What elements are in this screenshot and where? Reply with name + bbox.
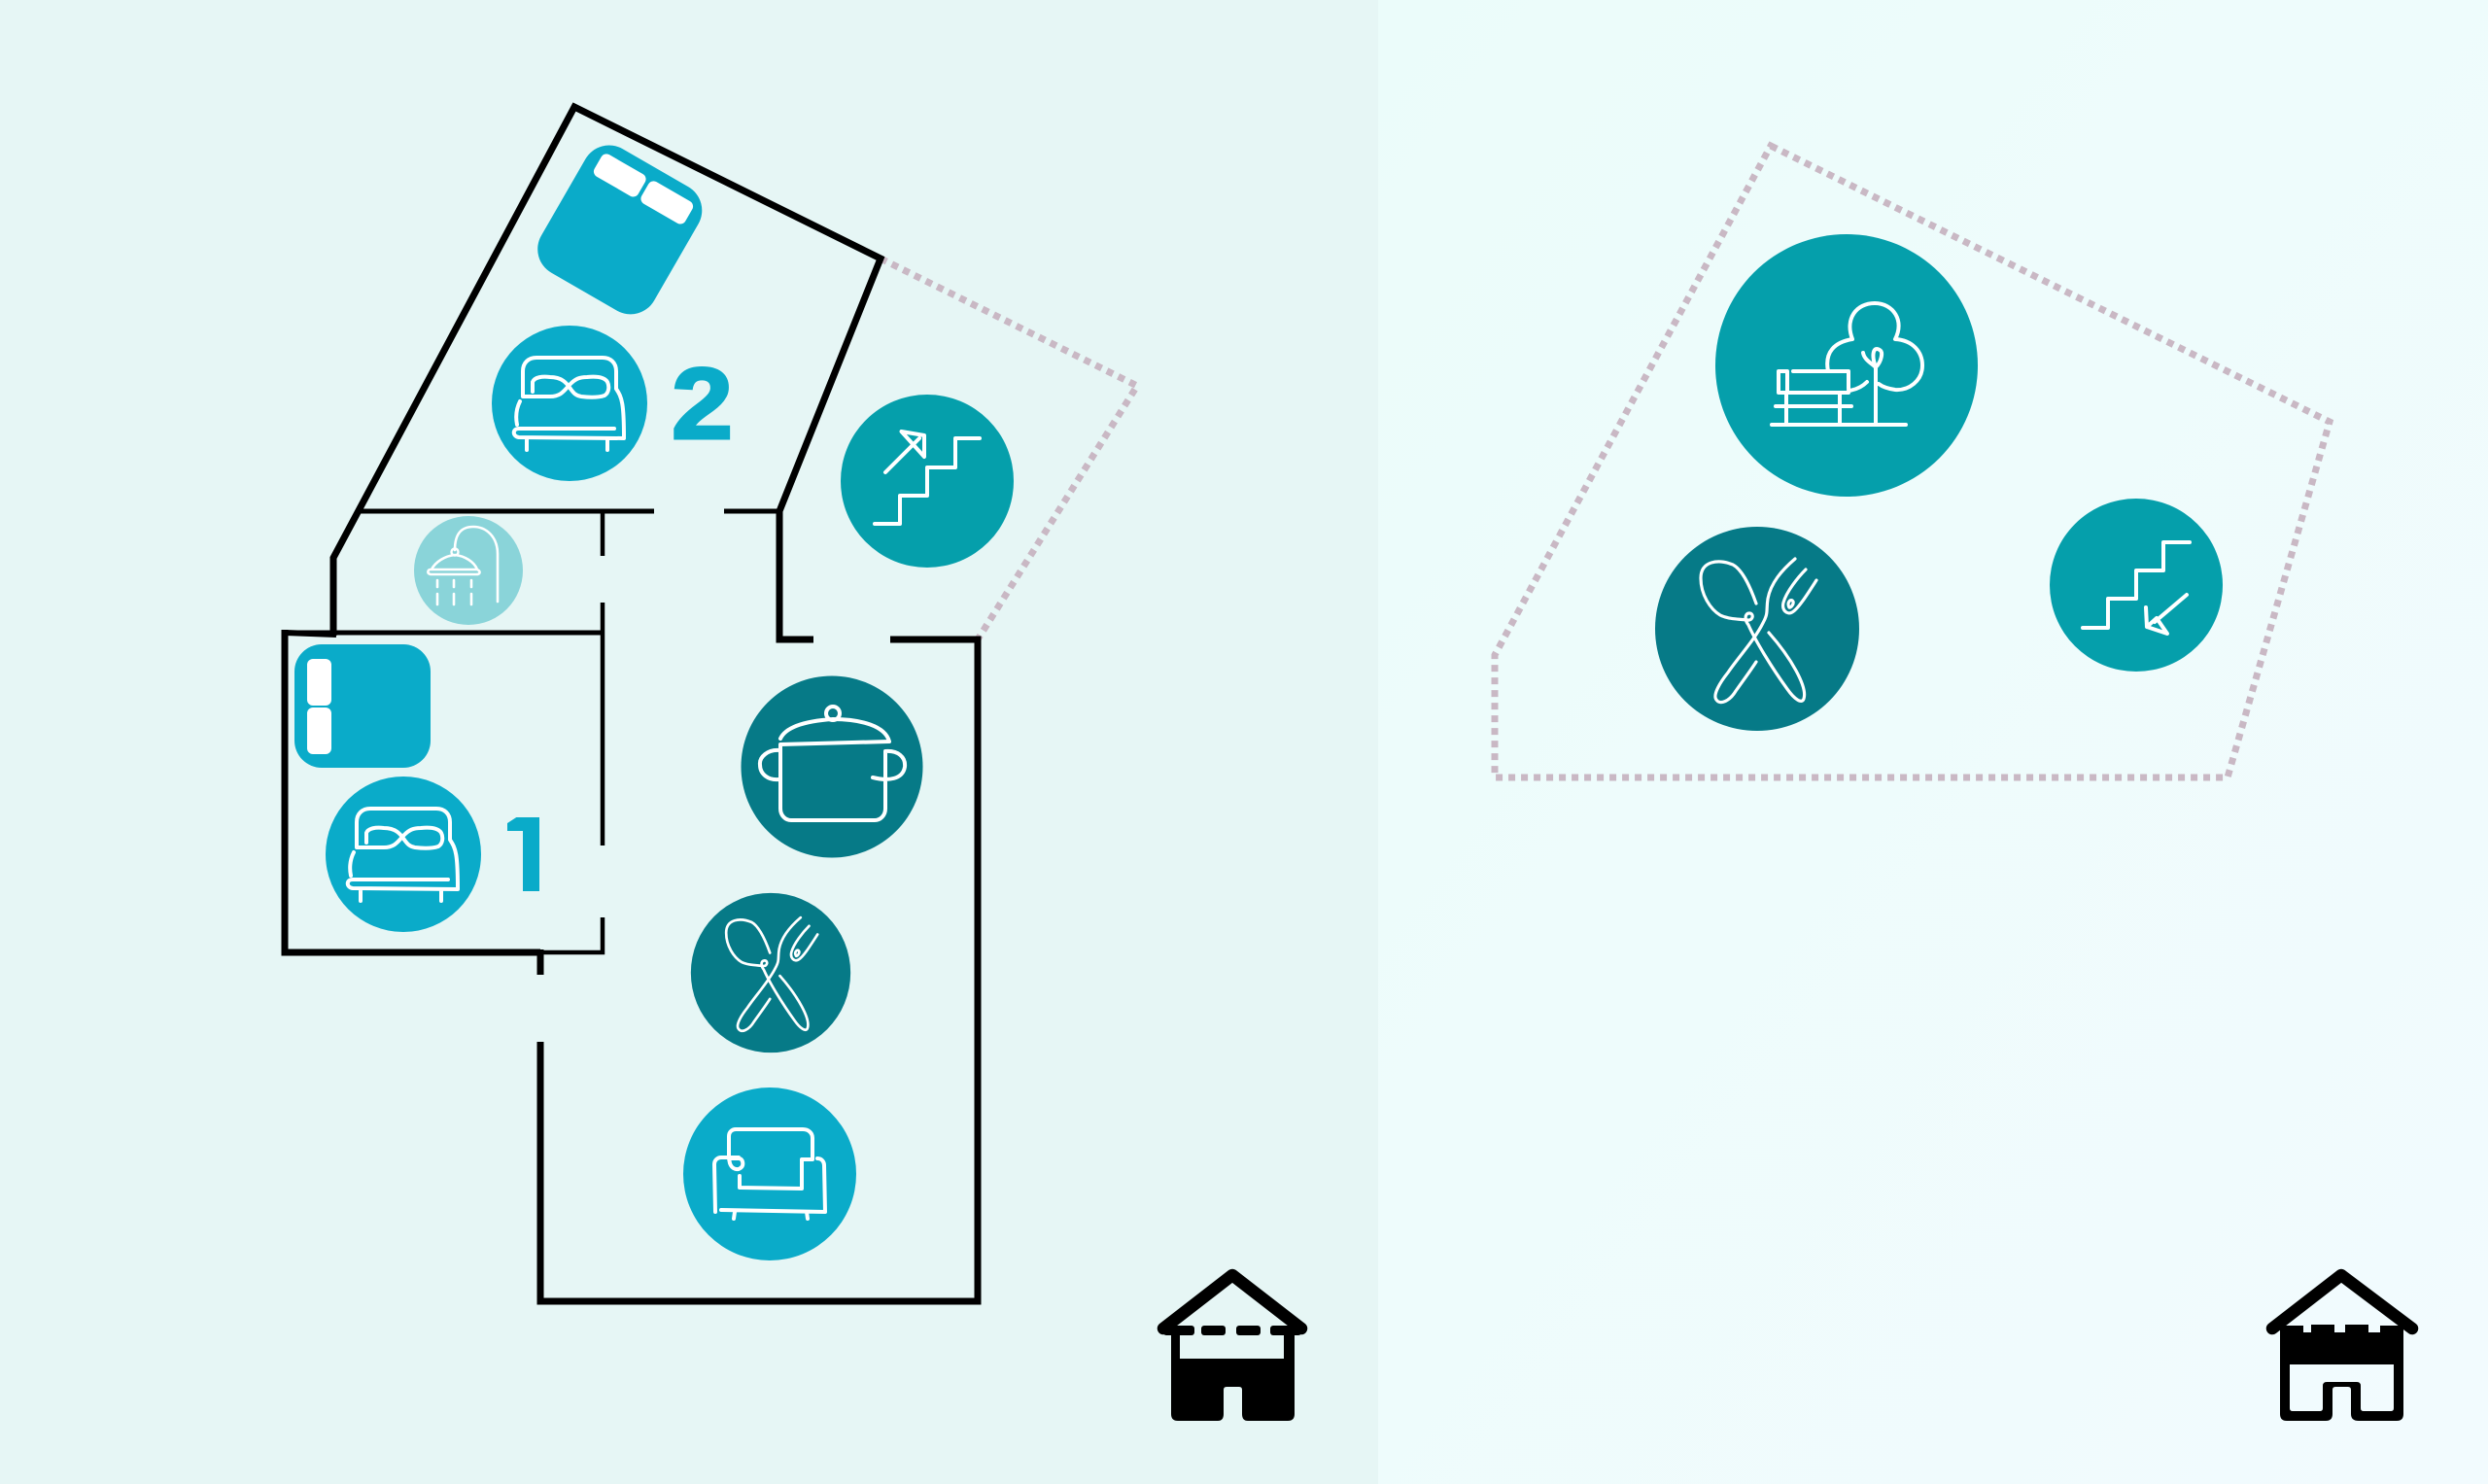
icon: house upper floor [2272, 1275, 2412, 1421]
icon: shower [414, 516, 523, 625]
icon: sofa [683, 1087, 856, 1260]
icon: stairs up [841, 395, 1014, 568]
number 2: 2 [672, 348, 733, 461]
icon: cooking pot [741, 676, 923, 857]
icon: house ground floor [1163, 1275, 1301, 1421]
dotted upper floor outline [1495, 146, 2330, 777]
icon: park bench and tree [1715, 234, 1978, 497]
icon: cutlery [691, 893, 850, 1053]
icon: bed room 2 [492, 326, 647, 481]
icon: cutlery [1655, 527, 1859, 731]
bed shape: room 2 [528, 135, 712, 325]
dotted terrace outline [881, 259, 1137, 639]
number 1: 1 [500, 799, 557, 914]
icon: bed room 1 [326, 777, 481, 932]
bed shape: room 1 [294, 644, 431, 768]
panel: ground floor background [0, 0, 1378, 1484]
ground floor plan [285, 107, 1301, 1421]
icon: stairs down [2050, 499, 2223, 672]
upper floor plan [1495, 146, 2412, 1421]
floor plan walls [285, 107, 978, 1301]
panel: upper floor background [1378, 0, 2488, 1484]
